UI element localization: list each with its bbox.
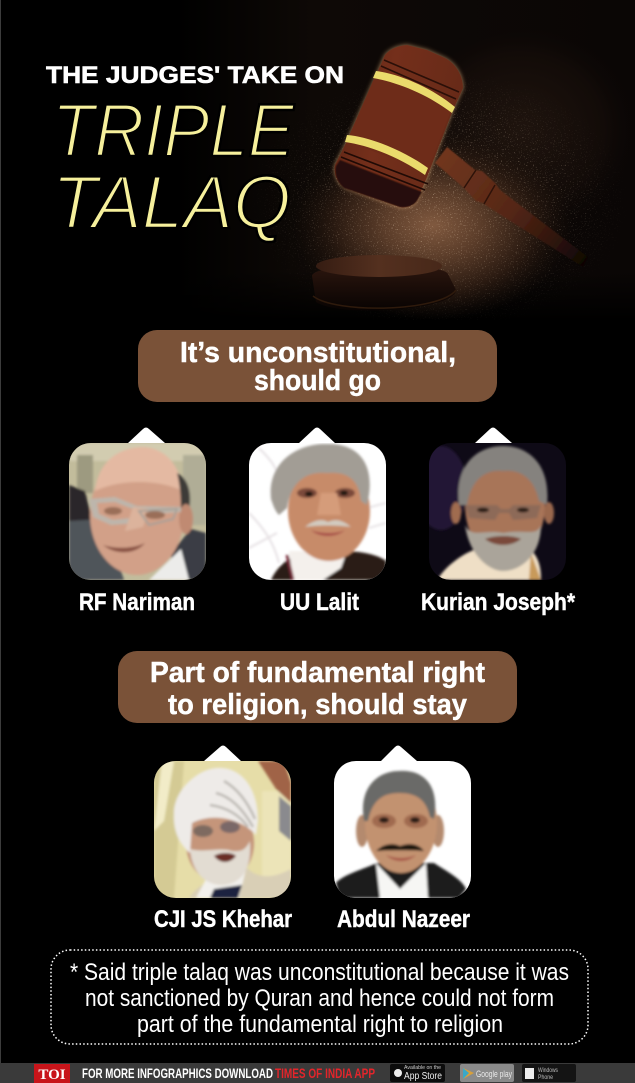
gavel head: [335, 45, 463, 207]
panel: unconstitutional heading pill: [138, 330, 497, 402]
logo: TOI: [34, 1064, 70, 1083]
name: Kurian Joseph*: [421, 589, 576, 616]
badge: Windows Phone: Phone: [538, 1075, 554, 1081]
portrait: UU Lalit: [249, 443, 386, 580]
pointer: [381, 746, 417, 761]
pointer: [299, 428, 335, 443]
panel: footnote box: [51, 950, 588, 1044]
portrait: RF Nariman: [69, 443, 206, 580]
panel: fundamental right heading pill: [118, 651, 517, 723]
gold band upper: [373, 71, 455, 113]
panel: unconstitutional heading pill: It’s unconstitutional,: [180, 337, 456, 369]
portrait: Abdul Nazeer: [334, 761, 471, 898]
gavel handle: [435, 147, 588, 267]
badge: Windows Phone: [522, 1064, 576, 1082]
panel: fundamental right heading pill: Part of fundamental right: [150, 657, 485, 689]
panel: judge Abdul Nazeer: [334, 746, 471, 933]
heading: the judges' take on: THE JUDGES' TAKE ON: [46, 62, 344, 89]
pointer: [475, 428, 512, 443]
icon: gavel: [335, 45, 588, 267]
name: CJI JS Khehar: [154, 906, 292, 933]
gold band lower: [345, 135, 428, 175]
panel: unconstitutional heading pill: should go: [254, 365, 381, 397]
portrait: CJI JS Khehar: [154, 761, 291, 898]
footer text: FOR MORE INFOGRAPHICS DOWNLOAD: [82, 1065, 273, 1081]
panel: footnote box: part of the fundamental right to religion: [137, 1011, 503, 1038]
badge: App Store: [390, 1064, 445, 1082]
badge: App Store: Available on the: [404, 1065, 441, 1071]
icon: gavel sounding block: [312, 255, 456, 311]
name: RF Nariman: [79, 589, 195, 616]
panel: header with gavel image: [46, 0, 635, 320]
panel: judge RF Nariman: [69, 428, 206, 616]
left edge line: [0, 0, 1, 1063]
panel: footnote box: * Said triple talaq was unconstitutional because it was: [70, 959, 569, 986]
panel: judge CJI JS Khehar: [154, 746, 292, 933]
panel: footer bar: [0, 1063, 635, 1083]
badge: Windows Phone: Windows: [538, 1068, 558, 1074]
portrait: Kurian Joseph: [415, 443, 566, 580]
title: triple talaq: TALAQ: [52, 160, 291, 244]
badge: Google play: [460, 1064, 514, 1082]
badge: Google play: Google play: [476, 1069, 512, 1079]
pointer: [204, 746, 241, 761]
panel: judge Kurian Joseph: [415, 428, 576, 616]
footer text: TIMES OF INDIA APP: [275, 1065, 375, 1081]
name: UU Lalit: [280, 589, 359, 616]
pointer: [128, 428, 165, 443]
panel: fundamental right heading pill: to religion, should stay: [168, 689, 467, 721]
badge: App Store: App Store: [404, 1071, 442, 1082]
panel: judge UU Lalit: [249, 428, 386, 616]
panel: footnote box: not sanctioned by Quran and hence could not form: [85, 985, 554, 1012]
title: triple talaq: TRIPLE: [52, 88, 295, 172]
logo: TOI: TOI: [38, 1067, 66, 1083]
title: triple talaq: [52, 88, 295, 244]
name: Abdul Nazeer: [337, 906, 470, 933]
